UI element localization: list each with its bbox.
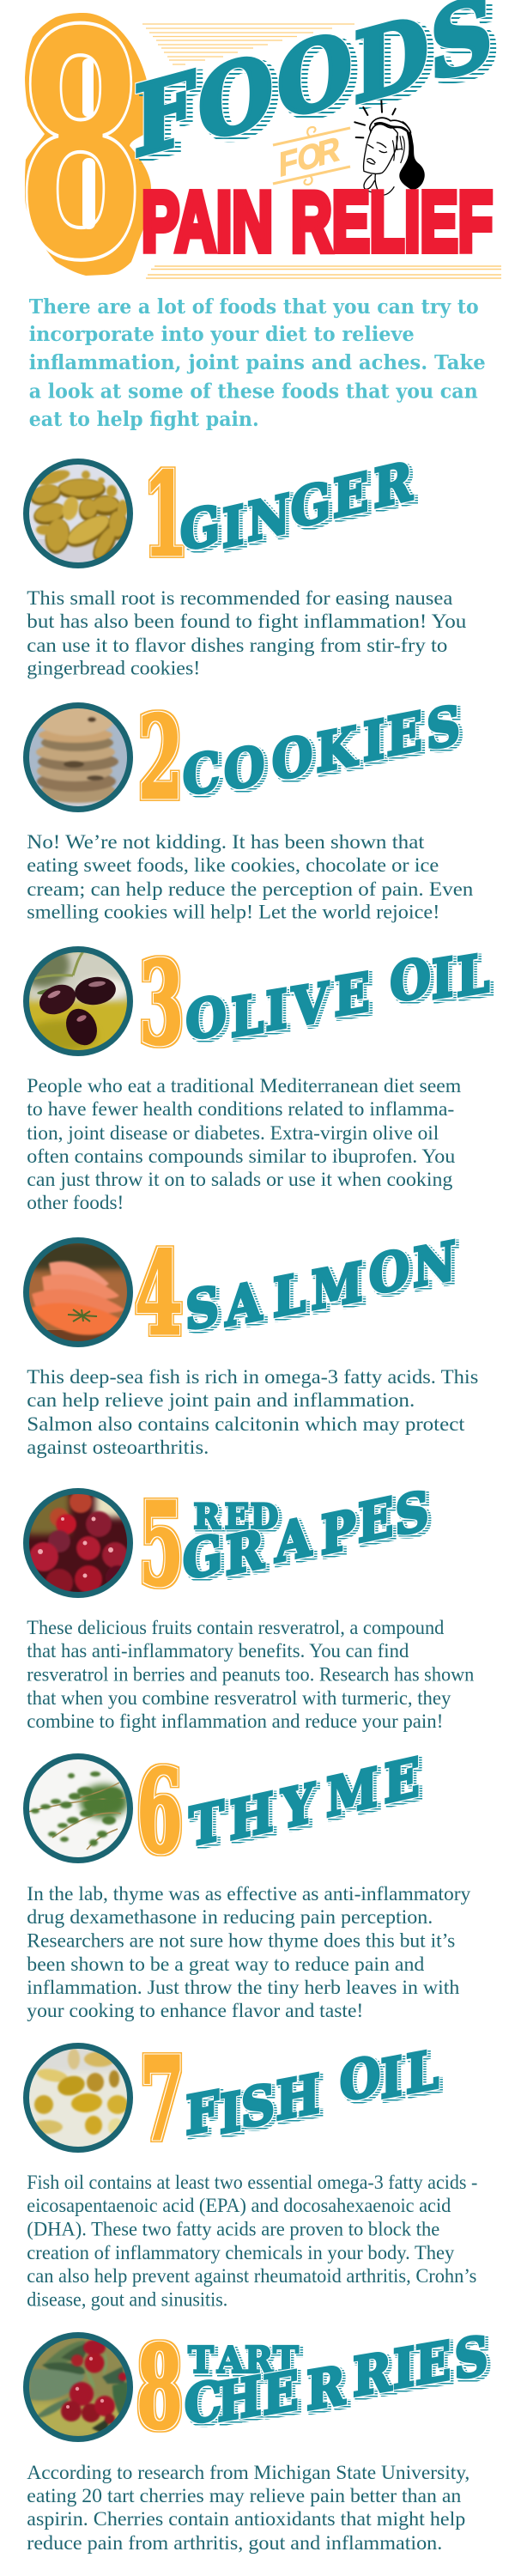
heading: cherries: CHERRIES — [185, 2323, 488, 2443]
description — [27, 587, 467, 678]
neck and collar — [364, 174, 394, 195]
facial features — [367, 143, 387, 164]
number 1: 1 — [143, 449, 188, 582]
section 1: ginger — [26, 449, 467, 678]
decorative bottom stripes — [146, 266, 501, 278]
description: your cooking to enhance flavor and taste! — [27, 2000, 363, 2021]
face outline — [363, 124, 397, 173]
description: Fish oil contains at least two essential omega-3 fatty acids - — [27, 2172, 477, 2193]
description: been shown to be a great way to reduce pain and — [27, 1953, 425, 1975]
description: Researchers are not sure how thyme does this but it’s — [27, 1930, 455, 1951]
description: can just throw it on to salads or use it when cooking — [27, 1169, 453, 1190]
number 4: 4 — [135, 1226, 183, 1361]
heading: fish oil: FISH OIL — [185, 2033, 439, 2153]
big number 8 — [20, 0, 151, 328]
description: reduce pain from arthritis, gout and inflammation. — [27, 2532, 442, 2554]
intro paragraph: a look at some of these foods that you can — [29, 380, 478, 404]
section 6: thyme — [26, 1744, 471, 2021]
description — [27, 1883, 471, 2021]
description: eating 20 tart cherries may relieve pain better than an — [27, 2485, 462, 2506]
heading: PAIN RELIEF: PAIN — [142, 174, 273, 269]
description: that when you combine resveratrol with turmeric, they — [27, 1687, 451, 1709]
description: but has also been found to fight inflammation! You — [27, 611, 467, 632]
section 4: salmon — [26, 1226, 478, 1458]
description: These delicious fruits contain resveratrol, a compound — [27, 1617, 445, 1638]
number 2: 2 — [138, 692, 183, 825]
heading: olive oil: OLIVE OIL — [185, 936, 489, 1057]
section 2: cookies — [26, 692, 474, 922]
intro paragraph: inflammation, joint pains and aches. Take — [29, 351, 486, 374]
photo: cookies — [26, 706, 130, 809]
description: Salmon also contains calcitonin which may protect — [27, 1413, 465, 1435]
inner highlights of 8 — [82, 58, 95, 229]
photo: thyme — [26, 1757, 130, 1860]
photo: grapes — [26, 1491, 130, 1596]
photo: fish oil capsules — [26, 2045, 130, 2150]
intro paragraph: eat to help fight pain. — [29, 408, 259, 431]
orange blob behind 8 — [25, 13, 151, 276]
photo: cherries — [26, 2336, 130, 2439]
hand — [392, 136, 404, 163]
photo: ginger — [26, 462, 130, 565]
description: that has anti-inflammatory benefits. You can find — [27, 1640, 409, 1662]
hair band — [374, 123, 408, 131]
description: inflammation. Just throw the tiny herb leaves in with — [27, 1977, 460, 1998]
section 3: olive oil — [18, 936, 489, 1213]
hair top — [370, 118, 410, 133]
description — [27, 831, 474, 922]
section 7: fish oil — [26, 2033, 477, 2310]
description: to have fewer health conditions related to inflamma- — [27, 1098, 454, 1120]
header: title block — [20, 0, 501, 328]
section 5: red grapes — [26, 1478, 475, 1732]
intro paragraph: There are a lot of foods that you can try to — [29, 295, 479, 319]
description: disease, gout and sinusitis. — [27, 2289, 227, 2310]
description: This deep-sea fish is rich in omega-3 fatty acids. This — [27, 1366, 478, 1388]
description: often contains compounds similar to ibuprofen. You — [27, 1145, 456, 1167]
description: eicosapentaenoic acid (EPA) and docosahexaenoic acid — [27, 2195, 451, 2216]
photo: salmon — [26, 1240, 130, 1345]
intro paragraph — [29, 295, 486, 431]
number 8: 8 — [136, 2320, 183, 2455]
heading: red: RED — [193, 1497, 278, 1537]
pain ticks — [354, 100, 396, 137]
description — [27, 2172, 477, 2310]
description: No! We’re not kidding. It has been shown that — [27, 831, 425, 853]
description: smelling cookies will help! Let the world rejoice! — [27, 902, 439, 922]
heading: PAIN RELIEF — [142, 174, 493, 269]
heading: thyme: THYME — [189, 1746, 420, 1862]
heading: grapes: GRAPES — [183, 1478, 429, 1596]
number 6: 6 — [136, 1744, 183, 1879]
heading: FOR with ornaments — [273, 127, 350, 185]
intro paragraph: incorporate into your diet to relieve — [29, 323, 415, 346]
description: can also help prevent against rheumatoid arthritis, Crohn’s — [27, 2265, 476, 2287]
description — [27, 1075, 461, 1213]
description: combine to fight inflammation and reduce your pain! — [27, 1710, 443, 1732]
description: eating sweet foods, like cookies, chocolate or ice — [27, 854, 439, 876]
section 8: tart cherries — [26, 2320, 488, 2554]
number 7: 7 — [140, 2033, 185, 2166]
number 3: 3 — [139, 938, 184, 1071]
description: creation of inflammatory chemicals in your body. They — [27, 2242, 455, 2263]
heading: ginger: GINGER — [180, 449, 414, 570]
description: tion, joint disease or diabetes. Extra-virgin olive oil — [27, 1122, 439, 1144]
description: can use it to flavor dishes ranging from stir-fry to — [27, 635, 447, 656]
description: resveratrol in berries and peanuts too. Research has shown — [27, 1664, 475, 1685]
number 5: 5 — [139, 1479, 184, 1612]
description: can help relieve joint pain and inflammation. — [27, 1389, 415, 1411]
description: other foods! — [27, 1192, 124, 1213]
description: drug dexamethasone in reducing pain perception. — [27, 1906, 433, 1928]
heading: salmon: SALMON — [185, 1228, 456, 1346]
description — [27, 1617, 475, 1732]
description — [27, 1366, 478, 1458]
description: In the lab, thyme was as effective as anti-inflammatory — [27, 1883, 471, 1905]
description: People who eat a traditional Mediterranean diet seem — [27, 1075, 461, 1097]
description: (DHA). These two fatty acids are proven to block the — [27, 2219, 439, 2239]
description: aspirin. Cherries contain antioxidants that might help — [27, 2508, 465, 2530]
photo: olives — [18, 943, 130, 1053]
back hair — [399, 121, 425, 190]
heading: cookies: COOKIES — [183, 692, 460, 811]
word FOR: FOR — [279, 130, 340, 185]
description: This small root is recommended for easing nausea — [27, 587, 452, 609]
description: According to research from Michigan State University, — [27, 2462, 470, 2483]
heading: tart: TART — [188, 2339, 299, 2381]
ornament lines and curls — [273, 127, 350, 185]
description: cream; can help reduce the perception of pain. Even — [27, 878, 474, 900]
description — [27, 2462, 470, 2554]
description: gingerbread cookies! — [27, 658, 200, 678]
decorative top stripes — [142, 24, 354, 64]
illustration: woman with headache — [354, 100, 425, 195]
description: against osteoarthritis. — [27, 1437, 209, 1458]
